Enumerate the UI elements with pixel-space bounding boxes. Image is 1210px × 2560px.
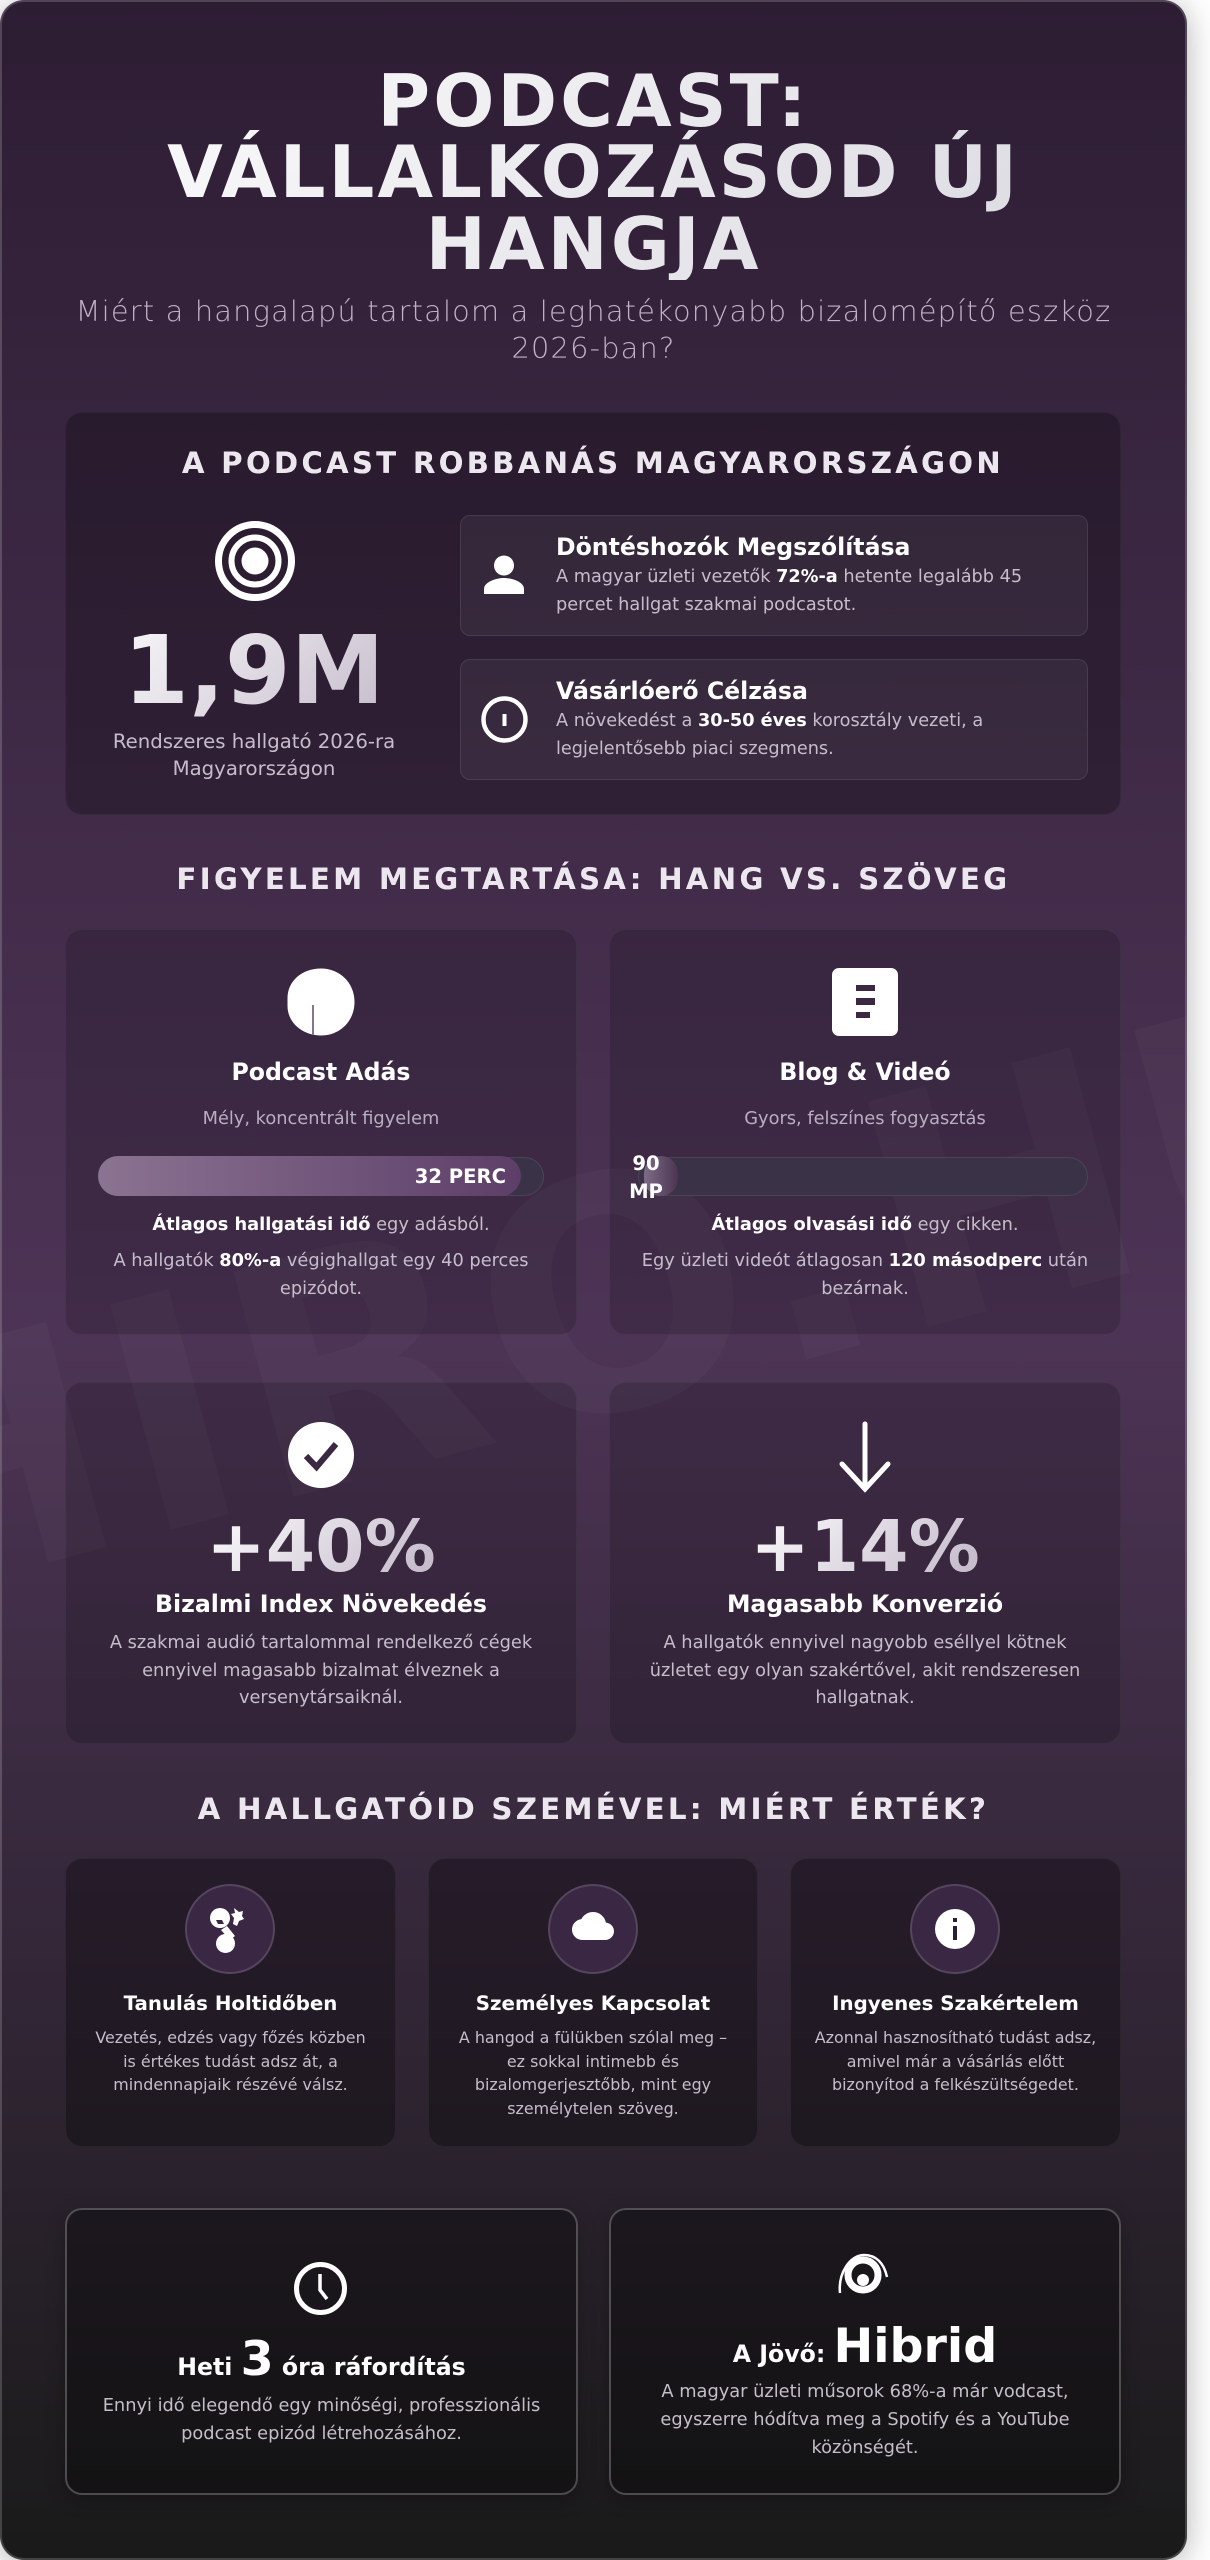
text: Egy üzleti videót átlagosan 120 másodperc után [642,1250,1088,1271]
panel: podcast explosion in Hungary [66,413,1120,814]
text [103,2395,540,2444]
text: bezárnak. [821,1278,909,1299]
panel: trust index [66,1383,576,1743]
stat: 1,9M listeners [66,623,442,719]
subtitle: Miért a hangalapú tartalom a leghatékonyabb bizalomépítő eszköz [76,294,1111,328]
text: A szakmai audió tartalommal rendelkező cégek [110,1632,532,1653]
text: Átlagos hallgatási idő egy adásból. [152,1214,490,1235]
text: Azonnal hasznosítható tudást adsz, [815,2028,1096,2047]
text [95,2028,366,2094]
text: Vezetés, edzés vagy főzés közben [95,2028,366,2047]
bar fill [644,1156,678,1196]
text: is értékes tudást adsz át, a [123,2052,338,2071]
text: amivel már a vásárlás előtt [847,2052,1064,2071]
title: Döntéshozók Megszólítása [556,533,910,561]
heading [66,443,1120,483]
subtitle: 2026-ban? [512,331,675,365]
text: ennyivel magasabb bizalmat élveznek a [142,1660,500,1681]
text [459,2028,727,2118]
card: buying power [460,659,1088,780]
bar fill [98,1156,521,1196]
subtitle: Mély, koncentrált figyelem [203,1108,439,1129]
text: A hallgatók 80%-a végighallgat egy 40 perces [113,1250,529,1271]
icon: podcast blob [288,968,354,1036]
stat caption: Rendszeres hallgató 2026-ra [113,730,395,753]
text: hallgatnak. [815,1687,915,1708]
icon: person [484,556,524,594]
title: VÁLLALKOZÁSOD ÚJ [167,130,1020,214]
stat: 1,9M listeners: 1,9M [123,616,385,726]
icon badge [910,1884,1000,1974]
icon badge [548,1884,638,1974]
icon: arrow down [840,1422,890,1493]
text [556,567,1022,615]
title: Blog & Videó [779,1058,951,1086]
text [660,2381,1070,2458]
section heading: listeners: A HALLGATÓID SZEMÉVEL: MIÉRT ÉRTÉK? [198,1792,989,1826]
title: HANGJA [426,202,761,286]
title: Tanulás Holtidőben [124,1992,337,2015]
title: Podcast Adás [232,1058,410,1086]
text: bizonyítod a felkészültségedet. [832,2075,1079,2094]
text: A magyar üzleti vezetők 72%-a hetente legalább 45 [556,567,1022,587]
text: epizódot. [280,1278,362,1299]
title: Magasabb Konverzió [727,1590,1003,1618]
section heading: attention [0,859,1187,899]
icon: document [832,968,898,1036]
text: bizalomgerjesztőbb, mint egy [475,2075,711,2094]
panel: hybrid future [610,2209,1120,2494]
panel: weekly time [66,2209,577,2494]
icon: check circle [288,1422,354,1488]
bar label: MP [629,1180,663,1203]
title: Személyes Kapcsolat [476,1992,710,2015]
text: személytelen szöveg. [507,2099,679,2118]
icon: clock [294,2262,347,2315]
text: egyszerre hódítva meg a Spotify és a YouTube [660,2409,1070,2430]
text: Ennyi idő elegendő egy minőségi, professzionális [103,2395,540,2416]
text: A növekedést a 30-50 éves korosztály vezeti, a [556,711,983,731]
panel: free expertise [791,1859,1120,2146]
title: PODCAST: [377,59,810,143]
title [0,66,1187,280]
icon: headphones blob [210,1908,244,1953]
bar label: 32 PERC [415,1165,506,1188]
icon: info [935,1909,975,1949]
panel: conversion [610,1383,1120,1743]
bar label [629,1152,663,1203]
text: percet hallgat szakmai podcastot. [556,595,856,615]
subtitle: Gyors, felszínes fogyasztás [744,1108,986,1129]
bar: 32 perc [98,1157,544,1196]
title: Ingyenes Szakértelem [832,1992,1079,2015]
text [814,2028,1096,2094]
panel: blog and video [610,930,1120,1334]
icon badge [185,1884,275,1974]
heading: A PODCAST ROBBANÁS MAGYARORSZÁGON [182,446,1004,480]
icon: target [215,521,295,601]
stat: +14% [750,1505,980,1588]
text: közönségét. [811,2437,919,2458]
bar label: 90 [632,1152,660,1175]
stat caption [113,730,395,780]
text: A hallgatók ennyivel nagyobb eséllyel kötnek [663,1632,1067,1653]
icon: info ring [481,696,528,743]
text: Átlagos olvasási idő egy cikken. [711,1214,1019,1235]
panel: podcast episode [66,930,576,1334]
title: A Jövő: Hibrid [733,2319,997,2374]
text [642,1250,1088,1299]
text: podcast epizód létrehozásához. [181,2423,462,2444]
text: üzletet egy olyan szakértővel, akit rendszeresen [650,1660,1080,1681]
text [110,1632,532,1708]
title: Vásárlóerő Célzása [556,677,808,705]
text: A magyar üzleti műsorok 68%-a már vodcast, [661,2381,1069,2402]
text: A hangod a fülükben szólal meg – [459,2028,727,2047]
panel: learning [66,1859,395,2146]
text: mindennapjaik részévé válsz. [113,2075,348,2094]
title: Bizalmi Index Növekedés [155,1590,487,1618]
text: legjelentősebb piaci szegmens. [556,739,834,759]
header [76,59,1111,365]
text [650,1632,1080,1708]
text [113,1250,529,1299]
text: versenytársaiknál. [239,1687,403,1708]
stat: +40% [206,1505,436,1588]
text: ez sokkal intimebb és [507,2052,679,2071]
text [556,711,983,759]
card: decision makers [460,515,1088,636]
icon: cloud [572,1912,614,1940]
stat caption: Magyarországon [173,757,335,780]
section heading: attention: FIGYELEM MEGTARTÁSA: HANG VS. SZÖVEG [177,862,1010,896]
section heading: listeners [0,1789,1187,1829]
bar: 90 MP [638,1157,1088,1196]
title: Heti 3 óra ráfordítás [177,2332,466,2387]
icon: broadcast eye [838,2254,888,2294]
panel: personal connection [429,1859,757,2146]
subtitle [76,294,1111,365]
